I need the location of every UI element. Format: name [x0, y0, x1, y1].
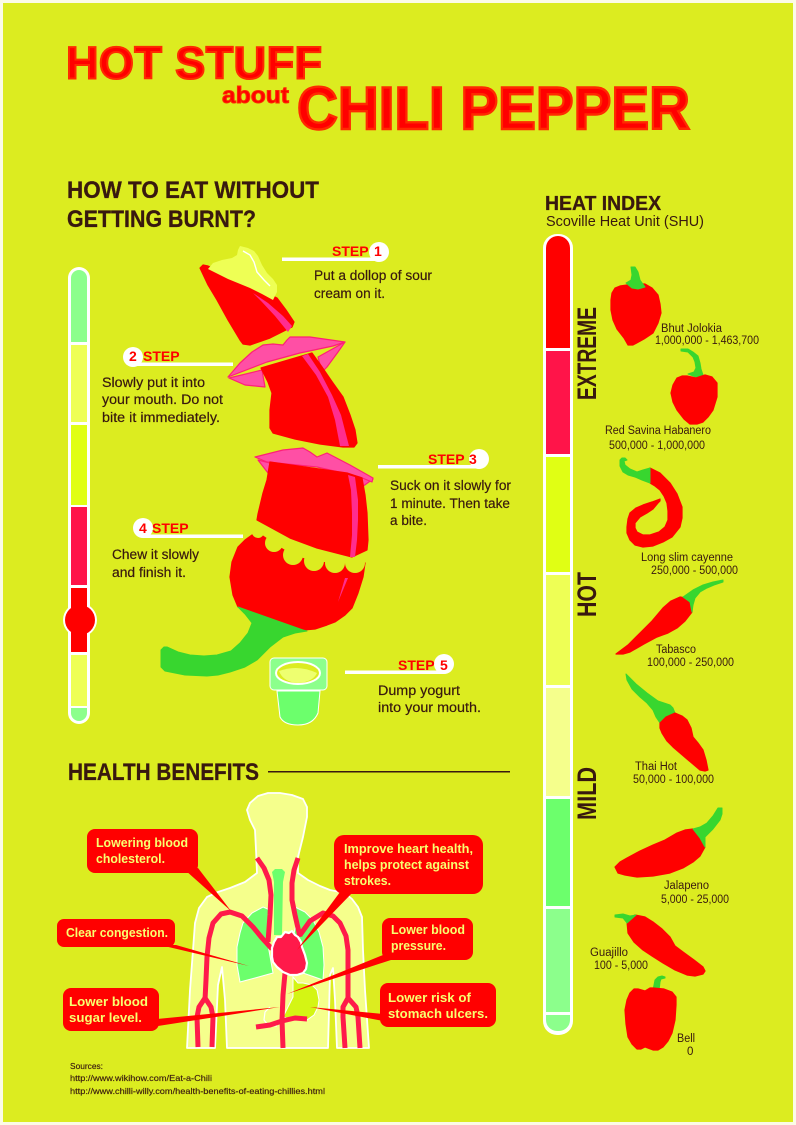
- label: mild: MILD: [572, 767, 602, 820]
- pepper: tabasco: [616, 580, 734, 669]
- body outline: [187, 793, 369, 1048]
- lips 1: [228, 337, 345, 387]
- callout: heart health: helps protect against: [344, 858, 470, 872]
- step 2: bite it immediately.: [102, 410, 220, 425]
- callout: cholesterol: Lowering blood: [96, 836, 188, 850]
- pepper: bhut jolokia: [611, 267, 759, 347]
- callout: stomach ulcers: [310, 983, 496, 1027]
- chili piece 3 stripe: [348, 475, 358, 557]
- pepper: tabasco: Tabasco: [656, 644, 696, 656]
- yogurt cup: [270, 658, 327, 725]
- label: hot: HOT: [572, 572, 602, 617]
- heart: [272, 931, 307, 975]
- pepper: tabasco: 100,000 - 250,000: [647, 657, 734, 669]
- pepper: guajillo: [590, 914, 705, 976]
- callout: blood pressure: pressure.: [391, 939, 446, 953]
- pepper: bell: Bell: [677, 1033, 695, 1045]
- step 2: 2: [129, 348, 137, 364]
- step 4: Chew it slowly: [112, 547, 199, 562]
- callout: heart health: strokes.: [344, 874, 391, 888]
- pepper: red savina habanero: 500,000 - 1,000,000: [609, 440, 705, 452]
- step 4: 4: [139, 520, 147, 536]
- step 3: Suck on it slowly for: [390, 478, 512, 493]
- arteries: [197, 858, 360, 1048]
- step 1: 1: [374, 243, 382, 259]
- pepper: red savina habanero: [605, 349, 717, 452]
- sources: http://www.chilli-willy.com/health-benefits-of-eating-chillies.html: [70, 1086, 325, 1096]
- step 5: 5: [440, 657, 448, 673]
- pepper: jalapeno: Jalapeno: [664, 880, 709, 892]
- pepper: bell: [625, 976, 695, 1058]
- lips 2: [255, 448, 373, 487]
- pepper: bhut jolokia: Bhut Jolokia: [661, 323, 723, 335]
- chili stem: [161, 607, 307, 676]
- pepper: guajillo: Guajillo: [590, 947, 628, 959]
- callout: blood pressure: Lower blood: [391, 923, 465, 937]
- pepper: red savina habanero: Red Savina Habanero: [605, 425, 711, 437]
- callout: blood pressure: [287, 918, 473, 994]
- callout: cholesterol: cholesterol.: [96, 852, 165, 866]
- pepper: thai hot: 50,000 - 100,000: [633, 774, 714, 786]
- chili piece 2: [261, 353, 357, 447]
- callout: heart health: [297, 835, 483, 950]
- sources: http://www.wikihow.com/Eat-a-Chili: [70, 1073, 212, 1083]
- title: CHILI PEPPER: [297, 75, 690, 142]
- callout: cholesterol: [87, 829, 231, 911]
- step 2: [102, 347, 233, 425]
- heading: heat index: HEAT INDEX: [545, 193, 662, 215]
- step 4: [112, 518, 243, 580]
- heat scale bar: [543, 234, 573, 1035]
- callout: congestion: [57, 919, 249, 966]
- heading: how to eat: [67, 177, 319, 233]
- trachea: [272, 869, 285, 935]
- step 5: [345, 654, 481, 715]
- pepper: thai hot: Thai Hot: [635, 761, 678, 773]
- stomach: [283, 977, 319, 1020]
- step 4: and finish it.: [112, 565, 186, 580]
- pepper: long slim cayenne: 250,000 - 500,000: [651, 565, 738, 577]
- heading: heat index: Scoville Heat Unit (SHU): [546, 214, 704, 230]
- step 3: STEP: [428, 451, 465, 467]
- lungs: [237, 907, 324, 982]
- title: about: [222, 82, 289, 108]
- callout: blood sugar: sugar level.: [69, 1011, 142, 1025]
- chili piece 1 with sour cream: [200, 246, 294, 345]
- callout: stomach ulcers: Lower risk of: [388, 991, 472, 1005]
- pepper: long slim cayenne: Long slim cayenne: [641, 552, 733, 564]
- step 5: STEP: [398, 657, 435, 673]
- step 4: STEP: [152, 520, 189, 536]
- heading: how to eat: HOW TO EAT WITHOUT: [67, 177, 319, 204]
- step 3: 1 minute. Then take: [390, 496, 510, 511]
- chili piece 2 stripe: [302, 354, 349, 446]
- label: extreme: EXTREME: [572, 307, 602, 400]
- callout: blood sugar: Lower blood: [69, 995, 148, 1009]
- step 1: cream on it.: [314, 286, 385, 301]
- title: [66, 38, 690, 142]
- callout: heart health: Improve heart health,: [344, 842, 473, 856]
- step 3: a bite.: [390, 513, 427, 528]
- heading: how to eat: GETTING BURNT?: [67, 206, 256, 233]
- pepper: guajillo: 100 - 5,000: [594, 960, 648, 972]
- body diagram: [187, 793, 369, 1048]
- callout: blood sugar: [63, 988, 280, 1031]
- step 1: Put a dollop of sour: [314, 268, 433, 283]
- pepper: thai hot: [626, 674, 714, 786]
- sources: [70, 1061, 325, 1096]
- step 2: STEP: [143, 348, 180, 364]
- step 5: into your mouth.: [378, 700, 481, 715]
- step 3: [378, 449, 512, 528]
- step 2: Slowly put it into: [102, 375, 205, 390]
- step 3: 3: [469, 451, 477, 467]
- chili piece 3: [257, 462, 368, 557]
- step 1: STEP: [332, 243, 369, 259]
- step 5: Dump yogurt: [378, 683, 460, 698]
- pepper: bhut jolokia: 1,000,000 - 1,463,700: [655, 335, 759, 347]
- heading: health benefits: HEALTH BENEFITS: [68, 759, 259, 786]
- pepper: bell: 0: [687, 1046, 693, 1058]
- step 1: [282, 242, 433, 301]
- pepper: jalapeno: 5,000 - 25,000: [661, 894, 729, 906]
- callout: stomach ulcers: stomach ulcers.: [388, 1007, 488, 1021]
- chili with eating steps: [161, 246, 373, 676]
- pepper: long slim cayenne: [620, 458, 738, 577]
- chili piece 4 bitten base: [230, 515, 368, 630]
- step 2: your mouth. Do not: [102, 392, 223, 407]
- callout: congestion: Clear congestion.: [66, 926, 168, 940]
- pepper: jalapeno: [615, 808, 729, 906]
- heading: heat index: [545, 193, 704, 230]
- sources: Sources:: [70, 1061, 103, 1071]
- title: HOT STUFF: [66, 38, 322, 88]
- thermometer: steps progress: [63, 267, 97, 724]
